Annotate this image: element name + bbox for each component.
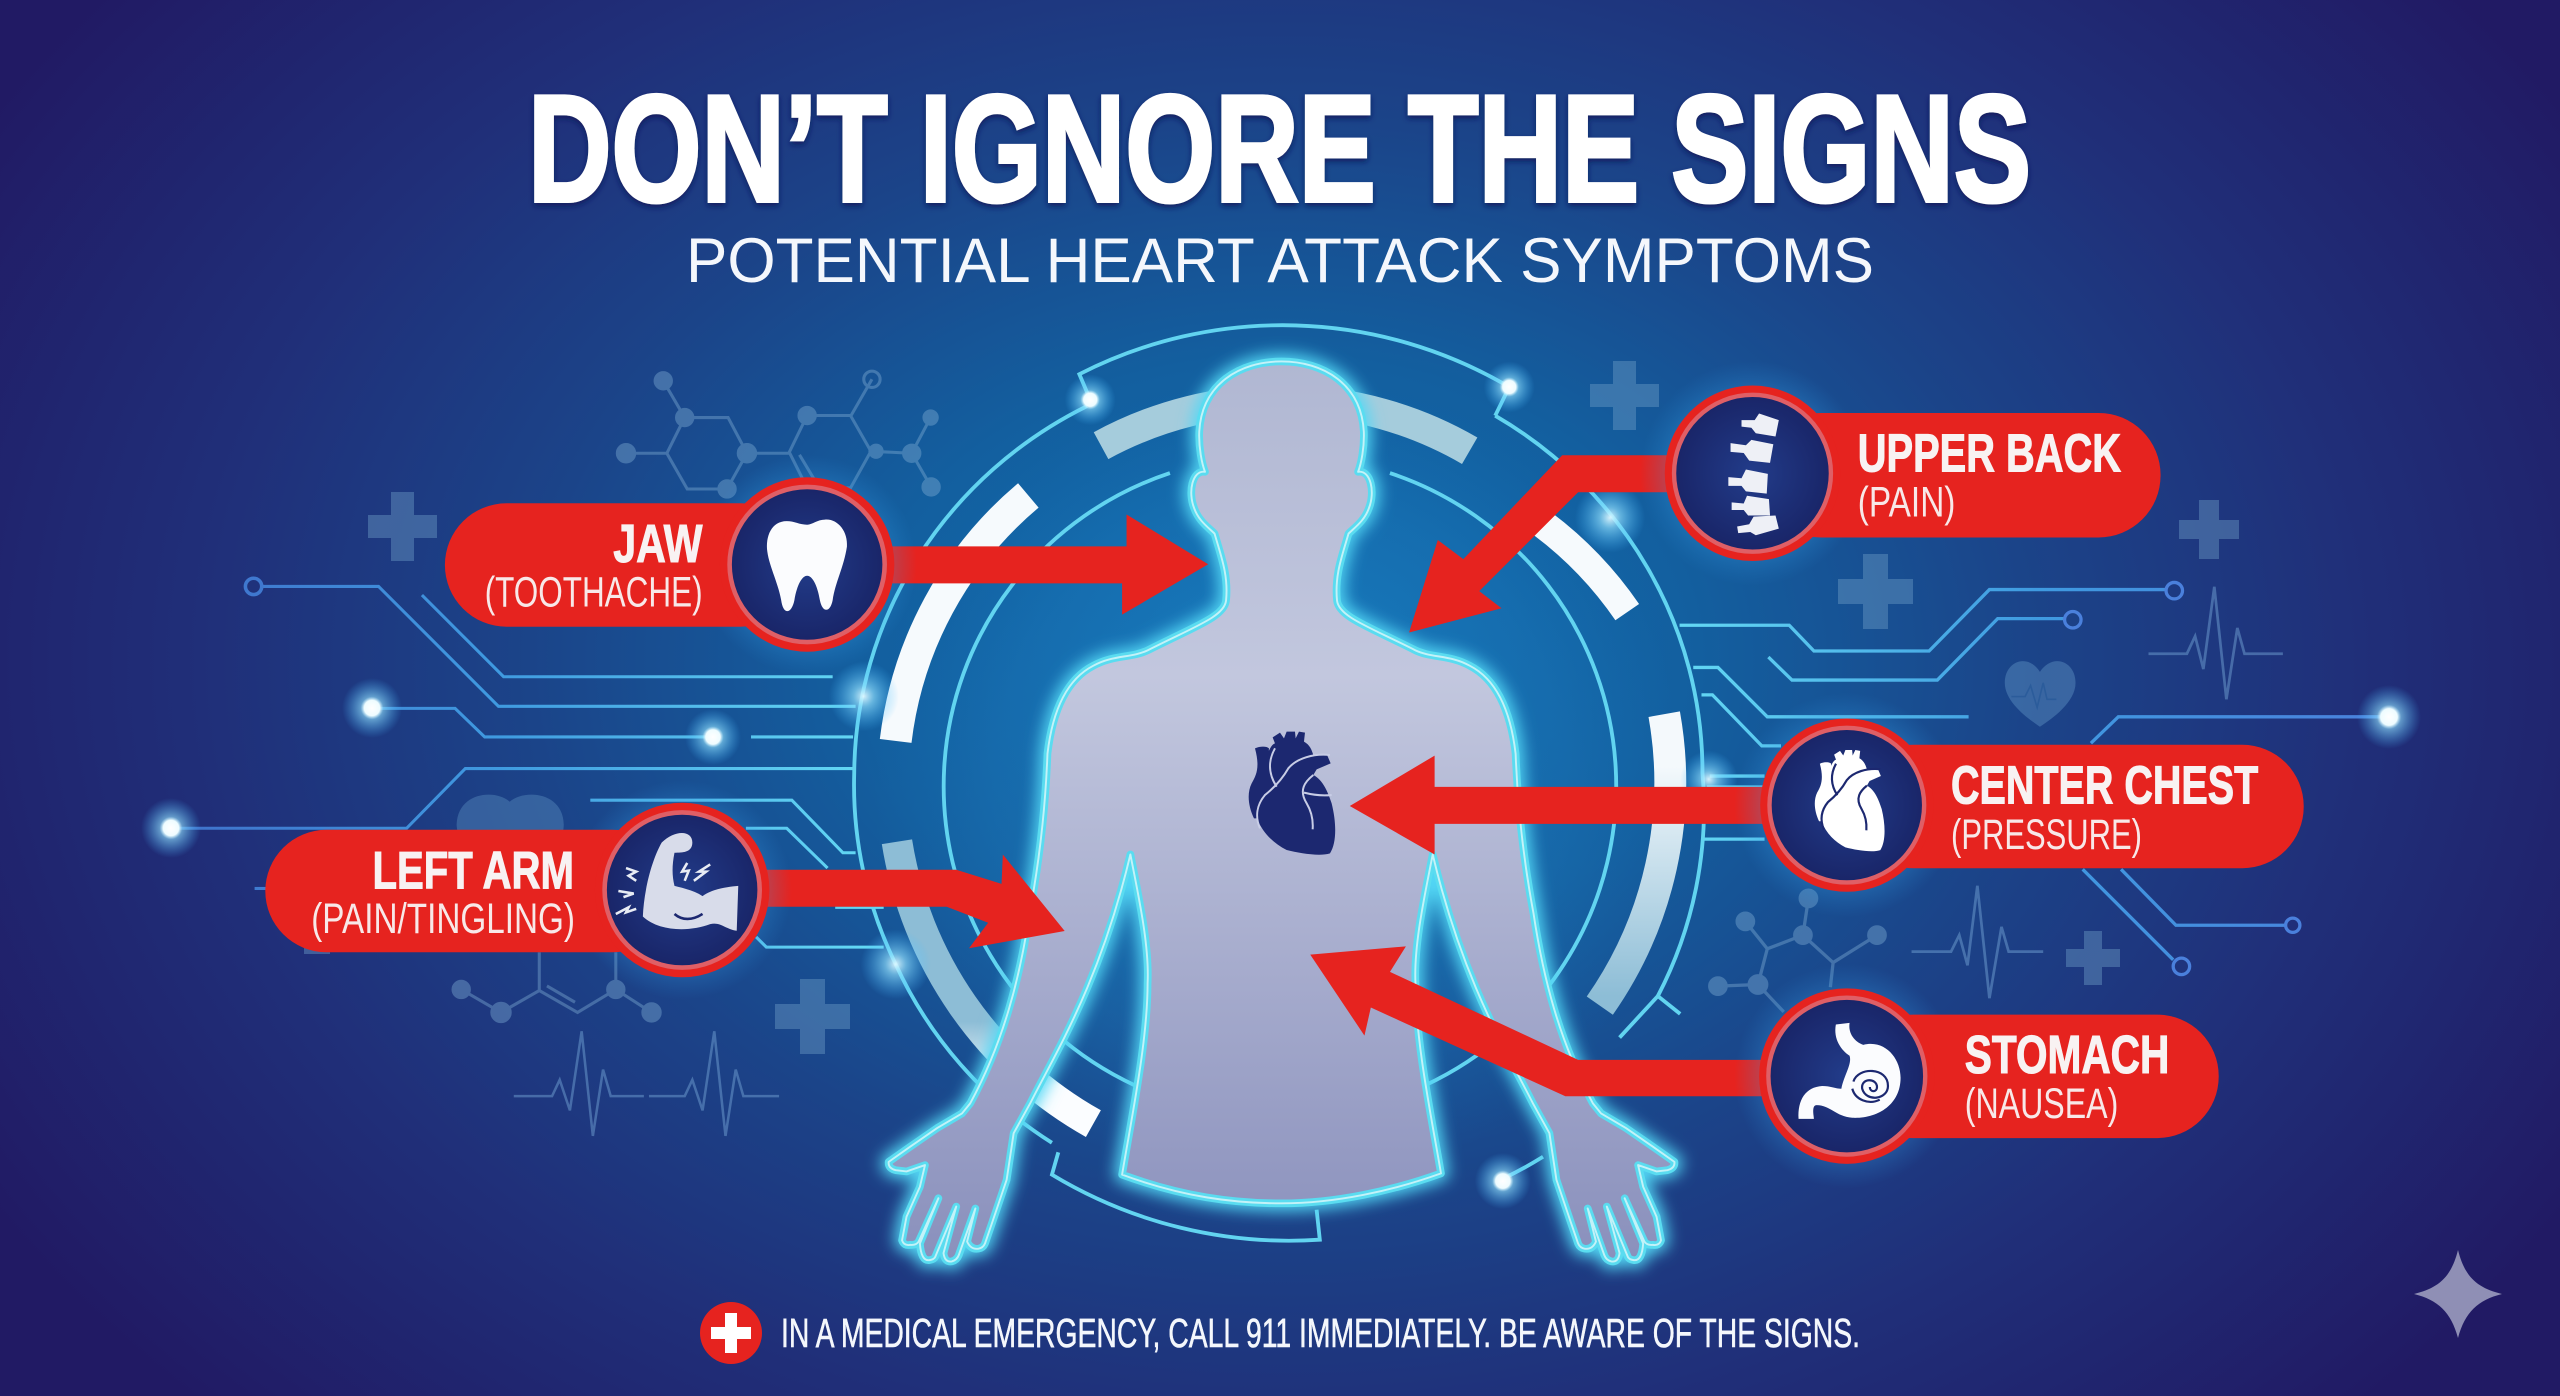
icon: sparkle — [2414, 1250, 2502, 1338]
icon: medical cross — [700, 1302, 762, 1364]
label: jaw: JAW — [613, 514, 703, 574]
icon: spine — [1728, 413, 1779, 535]
icon: white heart — [1815, 750, 1885, 851]
icon: tooth — [767, 520, 847, 611]
label: center chest: CENTER CHEST — [1951, 755, 2258, 815]
icon: stomach — [1798, 1023, 1901, 1119]
label: pain: (PAIN) — [1858, 479, 1955, 527]
callout: left arm — [265, 780, 792, 1000]
circuit lines: right — [1680, 582, 2390, 975]
arrow: center chest — [1350, 756, 1782, 854]
label: left arm: LEFT ARM — [372, 841, 574, 900]
decorative medical plus signs — [278, 361, 2239, 1054]
circuit lines: left — [169, 578, 884, 947]
ecg lines and faint heart: right — [1912, 587, 2283, 998]
callout: upper back — [1640, 361, 2161, 586]
callout: center chest — [1734, 693, 2304, 918]
label: nausea: (NAUSEA) — [1965, 1080, 2118, 1128]
arrow: left arm — [736, 854, 1065, 948]
molecule: lower right — [1710, 890, 1885, 1012]
glowing circuit nodes: left — [141, 678, 741, 858]
label: upper back: UPPER BACK — [1858, 424, 2121, 484]
human body silhouette — [889, 361, 1674, 1262]
faint heart: left — [457, 795, 564, 881]
footer note: IN A MEDICAL EMERGENCY, CALL 911 IMMEDIATELY. BE AWARE OF THE SIGNS. — [781, 1310, 1860, 1356]
glowing circuit node: right — [2357, 685, 2421, 749]
icon: flexed bicep — [616, 833, 738, 931]
arrow: upper back — [1409, 455, 1693, 633]
arrow: jaw — [864, 515, 1208, 615]
label: stomach: STOMACH — [1965, 1025, 2169, 1085]
ecg lines: lower left — [514, 1031, 779, 1136]
molecule: lower left — [453, 952, 660, 1022]
label: pressure: (PRESSURE) — [1951, 811, 2142, 859]
icon: heart on chest — [1249, 732, 1335, 855]
callout: jaw — [445, 455, 917, 674]
label: pain tingling: (PAIN/TINGLING) — [311, 895, 575, 943]
title: DON’T IGNORE THE SIGNS — [528, 64, 2031, 234]
arrows — [736, 455, 1782, 1096]
subtitle: POTENTIAL HEART ATTACK SYMPTOMS — [686, 226, 1874, 296]
label: toothache: (TOOTHACHE) — [485, 568, 703, 616]
central diagram: rings and arcs — [829, 325, 1738, 1241]
arrow: stomach — [1310, 946, 1782, 1096]
molecule: upper left — [617, 371, 939, 497]
callout: stomach — [1734, 964, 2219, 1189]
